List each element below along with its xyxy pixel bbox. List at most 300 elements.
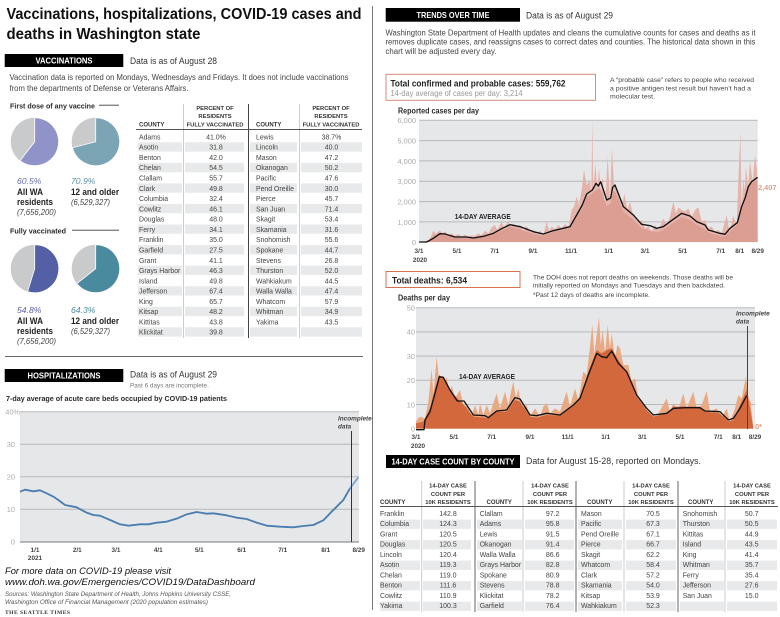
table: 14-day case count by county: 50.5 bbox=[745, 521, 759, 528]
14-day average line bbox=[416, 351, 747, 430]
table: 14-day case count by county: Garfield bbox=[480, 603, 504, 610]
table: percent fully vaccinated by county: Clark bbox=[139, 186, 156, 193]
text block: sources: Washington Office of Financial Management (2020 population estimates) bbox=[5, 599, 208, 606]
panel: vaccinations heading: Data is as of August 28 bbox=[130, 56, 217, 66]
credit: The Seattle Times: THE SEATTLE TIMES bbox=[5, 610, 70, 616]
table: percent fully vaccinated by county: 31.8 bbox=[209, 145, 223, 152]
table: 14-day case count by county: Wahkiakum bbox=[581, 603, 617, 610]
table: 14-day case count by county: 70.5 bbox=[646, 511, 660, 518]
table: percent fully vaccinated by county: 55.6 bbox=[325, 237, 338, 244]
table: percent fully vaccinated by county bbox=[136, 104, 362, 338]
table: 14-day case count by county bbox=[380, 481, 778, 612]
table: 14-day case count by county: Klickitat bbox=[480, 593, 504, 600]
table: percent fully vaccinated by county: 35.0 bbox=[209, 237, 223, 244]
table: 14-day case count by county: 91.5 bbox=[546, 531, 560, 538]
table: 14-day case count by county: 62.2 bbox=[646, 552, 660, 559]
table: percent fully vaccinated by county: 34.9 bbox=[325, 309, 338, 316]
text block: sources bbox=[5, 591, 231, 606]
table: 14-day case count by county: Ferry bbox=[683, 572, 699, 579]
chart: deaths per day: 8/1 bbox=[732, 434, 742, 441]
table: 14-day case count by county: 86.6 bbox=[546, 552, 560, 559]
table: 14-day case count by county: 10K RESIDENTS bbox=[425, 500, 471, 506]
table: 14-day case count by county: Whatcom bbox=[581, 562, 610, 569]
panel: fully vaccinated pies: 12 and older bbox=[71, 316, 119, 326]
panel: county case count heading: 14-DAY CASE COUNT BY COUNTY bbox=[392, 456, 515, 466]
table: percent fully vaccinated by county: Grays Harbor bbox=[139, 268, 181, 275]
chart: reported cases per day: 3/1 bbox=[415, 248, 424, 255]
table: percent fully vaccinated by county: Stevens bbox=[256, 258, 281, 265]
chart: hospital beds line chart: 1/1 bbox=[31, 547, 40, 554]
table: percent fully vaccinated by county: Whitman bbox=[256, 309, 283, 316]
callout: more data link: www.doh.wa.gov/Emergencies/COVID19/DataDashboard bbox=[5, 577, 256, 588]
panel: vaccinations heading: VACCINATIONS bbox=[36, 56, 93, 66]
table: 14-day case count by county: 124.3 bbox=[439, 521, 457, 528]
table: percent fully vaccinated by county: Island bbox=[139, 278, 158, 285]
chart: reported cases per day: 1/1 bbox=[604, 248, 614, 255]
text block: vaccination note: Vaccination data is reported on Mondays, Wednesdays and Fridays. It does not include vaccinations bbox=[10, 73, 349, 82]
panel: fully vaccinated pies: Fully vaccinated bbox=[10, 226, 66, 236]
table: percent fully vaccinated by county: Douglas bbox=[139, 217, 165, 224]
table: 14-day case count by county: Lincoln bbox=[380, 552, 402, 559]
column divider bbox=[372, 6, 373, 610]
chart: deaths per day: 14-DAY AVERAGE bbox=[459, 372, 515, 381]
table: percent fully vaccinated by county: 40.0 bbox=[325, 145, 338, 152]
table: percent fully vaccinated by county: 39.8 bbox=[209, 330, 223, 337]
table: 14-day case count by county: COUNTY bbox=[587, 500, 612, 506]
chart: hospital beds line chart: 0 bbox=[11, 538, 15, 546]
table: percent fully vaccinated by county: Pierce bbox=[256, 196, 276, 203]
table: percent fully vaccinated by county: 49.8 bbox=[209, 278, 223, 285]
chart: reported cases per day: 8/1 bbox=[735, 248, 745, 255]
pie: fully vaccinated all residents bbox=[11, 245, 59, 293]
table: 14-day case count by county: 14-DAY CASE bbox=[531, 484, 569, 490]
chart: reported cases per day: 2,407 bbox=[758, 183, 776, 192]
table: percent fully vaccinated by county: 48.0 bbox=[209, 217, 223, 224]
table: percent fully vaccinated by county: 50.2 bbox=[325, 165, 338, 172]
table: 14-day case count by county: 78.8 bbox=[546, 583, 560, 590]
table: 14-day case count by county: King bbox=[683, 552, 697, 559]
table: 14-day case count by county: Walla Walla bbox=[480, 552, 516, 559]
table: percent fully vaccinated by county: Asotin bbox=[139, 145, 158, 152]
table: 14-day case count by county: COUNTY bbox=[380, 500, 405, 506]
text block: probable case note bbox=[610, 77, 754, 100]
table: percent fully vaccinated by county: 26.8 bbox=[325, 258, 338, 265]
table: percent fully vaccinated by county: Clallam bbox=[139, 176, 162, 182]
table: percent fully vaccinated by county: Okanogan bbox=[256, 165, 288, 172]
table: percent fully vaccinated by county: 54.5 bbox=[209, 165, 223, 172]
table: 14-day case count by county: COUNT PER bbox=[735, 492, 770, 498]
table: 14-day case count by county: Chelan bbox=[380, 572, 402, 579]
chart: reported cases per day bbox=[398, 116, 776, 264]
table: percent fully vaccinated by county: 46.1 bbox=[209, 206, 223, 213]
callout: total cases box bbox=[386, 74, 596, 100]
table: 14-day case count by county: Mason bbox=[581, 511, 602, 518]
chart: reported cases per day: 14-DAY AVERAGE bbox=[455, 212, 511, 221]
table: 14-day case count by county: Asotin bbox=[380, 562, 399, 569]
table: percent fully vaccinated by county: 48.2 bbox=[209, 309, 223, 316]
table: percent fully vaccinated by county: Pacific bbox=[256, 176, 277, 182]
chart heading: cases: Reported cases per day bbox=[398, 106, 480, 116]
chart: deaths per day: 20 bbox=[407, 376, 415, 385]
chart: reported cases per day: 11/1 bbox=[565, 248, 577, 255]
table: percent fully vaccinated by county: Lewis bbox=[256, 134, 274, 141]
table: 14-day case count by county: 35.7 bbox=[745, 562, 759, 569]
table: 14-day case count by county: Grant bbox=[380, 531, 397, 538]
table: percent fully vaccinated by county: COUNTY bbox=[256, 122, 281, 128]
table: percent fully vaccinated by county: 71.4 bbox=[325, 206, 338, 213]
panel: county case count heading bbox=[386, 455, 701, 468]
daily case bars bbox=[419, 120, 758, 242]
chart: hospital beds line chart: 3/1 bbox=[112, 547, 121, 554]
chart: hospital beds line chart: 30 bbox=[7, 440, 15, 449]
table: percent fully vaccinated by county: 34.1 bbox=[209, 227, 223, 234]
chart: hospital beds line chart: 10 bbox=[7, 505, 15, 514]
text block: probable case note: molecular test. bbox=[610, 94, 655, 100]
table: percent fully vaccinated by county: 41.0% bbox=[206, 134, 226, 141]
chart: reported cases per day: 3/1 bbox=[641, 248, 650, 255]
table: percent fully vaccinated by county: FULLY VACCINATED bbox=[187, 122, 243, 128]
chart: hospital beds line chart: 4/1 bbox=[154, 547, 163, 554]
chart: reported cases per day: 6,000 bbox=[398, 116, 416, 125]
table: percent fully vaccinated by county: 55.7 bbox=[209, 176, 223, 182]
chart: reported cases per day: 8/29 bbox=[751, 248, 764, 255]
table: percent fully vaccinated by county: 32.4 bbox=[209, 196, 223, 203]
panel: first dose pies: (7,656,200) bbox=[17, 208, 56, 217]
chart: reported cases per day: 1,000 bbox=[398, 218, 416, 227]
table: percent fully vaccinated by county: Thurston bbox=[256, 268, 283, 275]
table: 14-day case count by county: 67.3 bbox=[646, 521, 660, 528]
panel: fully vaccinated pies: All WA bbox=[17, 316, 43, 326]
table: percent fully vaccinated by county: Columbia bbox=[139, 196, 168, 203]
table: 14-day case count by county: 35.4 bbox=[745, 572, 759, 579]
table: percent fully vaccinated by county: Klickitat bbox=[139, 330, 163, 337]
panel: first dose pies bbox=[10, 102, 120, 217]
table: 14-day case count by county: Kitsap bbox=[581, 593, 600, 600]
panel: hospitalizations heading bbox=[5, 369, 217, 390]
table: 14-day case count by county: Adams bbox=[480, 521, 502, 528]
table: 14-day case count by county: 66.7 bbox=[646, 542, 660, 549]
callout: total cases box: Total confirmed and probable cases: 559,762 bbox=[390, 78, 566, 88]
panel: fully vaccinated pies: 54.8% bbox=[17, 305, 42, 315]
panel: trends heading: TRENDS OVER TIME bbox=[416, 10, 490, 20]
pie: fully vaccinated 12 and older bbox=[72, 245, 120, 293]
chart: deaths per day: 5/1 bbox=[676, 434, 685, 441]
table: 14-day case count by county: Snohomish bbox=[683, 511, 717, 518]
table: percent fully vaccinated by county: Cowlitz bbox=[139, 206, 162, 213]
chart: hospital beds line chart: 5/1 bbox=[195, 547, 204, 554]
panel: fully vaccinated pies: 64.3% bbox=[71, 305, 96, 315]
panel: fully vaccinated pies bbox=[10, 226, 120, 346]
text block: trends note: chart will be adjusted every day. bbox=[386, 47, 496, 56]
table: 14-day case count by county: 10K RESIDENTS bbox=[729, 500, 775, 506]
table: percent fully vaccinated by county: Benton bbox=[139, 155, 161, 162]
table: 14-day case count by county: 27.6 bbox=[745, 583, 759, 590]
table: 14-day case count by county: 110.9 bbox=[440, 593, 457, 600]
table: 14-day case count by county: 95.8 bbox=[546, 521, 560, 528]
table: percent fully vaccinated by county: 45.7 bbox=[325, 196, 338, 203]
chart: deaths per day: 7/1 bbox=[487, 434, 497, 441]
table: percent fully vaccinated by county: Wahkiakum bbox=[256, 278, 292, 285]
chart: reported cases per day: 4,000 bbox=[398, 157, 416, 166]
table: 14-day case count by county: 119.3 bbox=[440, 562, 457, 569]
chart: hospital beds line chart: 8/1 bbox=[321, 547, 331, 554]
table: percent fully vaccinated by county: RESIDENTS bbox=[198, 114, 232, 120]
table: percent fully vaccinated by county: Yakima bbox=[256, 319, 279, 326]
text block: vaccination note: from the departments of Defense or Veterans Affairs. bbox=[10, 84, 188, 93]
table: 14-day case count by county: 14-DAY CASE bbox=[632, 484, 670, 490]
chart: hospital beds line chart: Incomplete bbox=[338, 416, 372, 422]
callout: more data link bbox=[5, 566, 256, 588]
chart: deaths per day: 40 bbox=[407, 328, 415, 337]
table: percent fully vaccinated by county: Skagit bbox=[256, 217, 275, 224]
table: 14-day case count by county: 58.4 bbox=[646, 562, 660, 569]
table: percent fully vaccinated by county: 42.0 bbox=[209, 155, 223, 162]
table: 14-day case count by county: 43.5 bbox=[745, 542, 759, 549]
table: 14-day case count by county: 120.5 bbox=[439, 531, 457, 538]
chart: reported cases per day: 2020 bbox=[413, 257, 428, 264]
table: 14-day case count by county: 82.8 bbox=[546, 562, 560, 569]
table: 14-day case count by county: Cowlitz bbox=[380, 593, 403, 600]
table: percent fully vaccinated by county: 31.6 bbox=[325, 227, 338, 234]
table: percent fully vaccinated by county: 27.5 bbox=[209, 248, 223, 254]
chart: deaths per day: 8/29 bbox=[749, 434, 762, 441]
table: percent fully vaccinated by county: Grant bbox=[139, 258, 156, 265]
table: 14-day case count by county: 52.3 bbox=[646, 603, 660, 610]
table: percent fully vaccinated by county: Kitsap bbox=[139, 309, 158, 316]
text block: probable case note: A “probable case” refers to people who received bbox=[610, 77, 754, 84]
table: percent fully vaccinated by county: Walla Walla bbox=[256, 289, 292, 296]
table: 14-day case count by county: COUNTY bbox=[486, 500, 512, 506]
table: percent fully vaccinated by county: 30.0 bbox=[325, 186, 338, 193]
table: percent fully vaccinated by county: Jefferson bbox=[139, 289, 167, 296]
text block: deaths note bbox=[533, 274, 733, 299]
table: percent fully vaccinated by county: 46.3 bbox=[209, 268, 223, 275]
text block: trends note: Washington State Department of Health updates and cleans the cumulative counts for cases and deaths as it bbox=[386, 28, 756, 38]
table: 14-day case count by county: 44.9 bbox=[745, 531, 759, 538]
chart: hospital beds line chart: 2021 bbox=[28, 555, 43, 562]
table: percent fully vaccinated by county: Whatcom bbox=[256, 299, 285, 306]
panel: trends heading bbox=[386, 8, 613, 22]
text block: trends note: removes duplicate cases, and reassigns cases to correct dates and counties. The historical data shown in this bbox=[386, 38, 756, 46]
table: 14-day case count by county: San Juan bbox=[683, 593, 712, 600]
table: percent fully vaccinated by county: PERCENT OF bbox=[312, 106, 350, 112]
chart: hospital beds line chart: 20 bbox=[7, 472, 15, 482]
panel: trends heading: Data is as of August 29 bbox=[526, 10, 613, 20]
table: percent fully vaccinated by county: PERCENT OF bbox=[196, 106, 234, 112]
panel: first dose pies: First dose of any vaccine bbox=[10, 102, 95, 110]
table: 14-day case count by county: Douglas bbox=[380, 542, 406, 549]
table: 14-day case count by county: 97.2 bbox=[546, 511, 560, 518]
table: percent fully vaccinated by county: Kittitas bbox=[139, 319, 160, 326]
pie: first dose 12 and older bbox=[72, 118, 120, 166]
table: percent fully vaccinated by county: Skamania bbox=[256, 227, 287, 234]
table: percent fully vaccinated by county: Garfield bbox=[139, 248, 163, 254]
table: 14-day case count by county: Benton bbox=[380, 583, 402, 590]
table: 14-day case count by county: COUNT PER bbox=[533, 492, 568, 498]
chart: deaths per day: 7/1 bbox=[714, 434, 723, 441]
table: 14-day case count by county: Pend Oreille bbox=[581, 531, 619, 538]
table: percent fully vaccinated by county: 52.0 bbox=[325, 268, 338, 275]
table: 14-day case count by county: 119.0 bbox=[440, 572, 457, 579]
table: percent fully vaccinated by county: 38.7% bbox=[322, 134, 341, 141]
table: 14-day case count by county: 142.8 bbox=[439, 511, 457, 518]
table: 14-day case count by county: Skamania bbox=[581, 583, 612, 590]
daily death bars bbox=[416, 317, 753, 429]
callout: total deaths box: Total deaths: 6,534 bbox=[392, 274, 468, 286]
callout: more data link: For more data on COVID-19 please visit bbox=[5, 566, 171, 577]
chart: reported cases per day: 2,000 bbox=[398, 198, 416, 206]
chart heading: deaths: Deaths per day bbox=[398, 294, 451, 302]
panel: hospitalizations heading: Data is as of August 29 bbox=[130, 370, 217, 380]
chart: deaths per day: 9/1 bbox=[526, 434, 535, 441]
panel: first dose pies: All WA bbox=[17, 187, 43, 197]
chart: deaths per day: 10 bbox=[407, 400, 415, 409]
panel: county case count heading: Data for August 15-28, reported on Mondays. bbox=[526, 456, 701, 466]
panel: first dose pies: residents bbox=[17, 197, 53, 207]
table: 14-day case count by county: 41.4 bbox=[745, 552, 759, 559]
chart: hospital beds line chart bbox=[5, 408, 372, 562]
table: percent fully vaccinated by county: 65.7 bbox=[209, 299, 223, 306]
table: percent fully vaccinated by county: 47.4 bbox=[325, 289, 338, 296]
table: 14-day case count by county: 15.0 bbox=[745, 593, 759, 600]
table: percent fully vaccinated by county: Spokane bbox=[256, 248, 283, 254]
text block: vaccination note bbox=[10, 73, 349, 93]
text block: deaths note: initially reported on Mondays and Tuesdays and then backdated. bbox=[533, 282, 725, 290]
table: 14-day case count by county: Columbia bbox=[380, 521, 409, 528]
table: percent fully vaccinated by county: RESIDENTS bbox=[314, 114, 348, 120]
table: 14-day case count by county: 80.9 bbox=[546, 572, 560, 579]
panel: first dose pies: (6,529,327) bbox=[71, 198, 110, 207]
table: percent fully vaccinated by county: FULLY VACCINATED bbox=[303, 122, 359, 128]
table: 14-day case count by county: 10K RESIDENTS bbox=[628, 500, 674, 506]
table: 14-day case count by county: 14-DAY CASE bbox=[733, 484, 771, 490]
table: 14-day case count by county: 14-DAY CASE bbox=[429, 484, 467, 490]
table: 14-day case count by county: Jefferson bbox=[683, 583, 711, 590]
title: deaths in Washington state bbox=[6, 26, 201, 43]
chart: deaths per day: 50 bbox=[407, 304, 415, 312]
table: 14-day case count by county: 91.4 bbox=[546, 542, 560, 549]
table: percent fully vaccinated by county: 47.6 bbox=[325, 176, 338, 182]
panel: hospitalizations heading: HOSPITALIZATIONS bbox=[28, 370, 101, 380]
text block: deaths note: The DOH does not report deaths on weekends. Those deaths will be bbox=[533, 274, 733, 282]
table: percent fully vaccinated by county: 57.9 bbox=[325, 299, 338, 306]
chart: reported cases per day: 5,000 bbox=[398, 136, 416, 146]
table: 14-day case count by county: Franklin bbox=[380, 511, 405, 518]
chart: deaths per day: 0* bbox=[755, 422, 762, 431]
table: 14-day case count by county: 50.7 bbox=[745, 511, 759, 518]
table: percent fully vaccinated by county: 53.4 bbox=[325, 217, 338, 224]
chart: deaths per day: 2020 bbox=[411, 443, 426, 450]
text block: probable case note: a positive antigen test result but haven’t had a bbox=[610, 85, 751, 92]
table: percent fully vaccinated by county: Adams bbox=[139, 134, 161, 141]
text block: sources: Sources: Washington State Department of Health, Johns Hopkins University CSSE, bbox=[5, 591, 231, 598]
chart: reported cases per day: 5/1 bbox=[453, 248, 462, 255]
table: 14-day case count by county: Pierce bbox=[581, 542, 601, 549]
table: 14-day case count by county: 76.4 bbox=[546, 603, 560, 610]
table: percent fully vaccinated by county: Ferry bbox=[139, 227, 156, 234]
chart: hospital beds line chart: 8/29 bbox=[352, 547, 365, 554]
table: 14-day case count by county: COUNTY bbox=[688, 500, 713, 506]
chart: reported cases per day: 0 bbox=[412, 238, 416, 247]
table: 14-day case count by county: 78.2 bbox=[546, 593, 560, 600]
table: percent fully vaccinated by county: 47.2 bbox=[325, 155, 338, 162]
chart: deaths per day: 3/1 bbox=[638, 434, 647, 441]
table: 14-day case count by county: Grays Harbor bbox=[480, 562, 522, 569]
table: percent fully vaccinated by county: 41.1 bbox=[209, 258, 223, 265]
table: percent fully vaccinated by county: 44.5 bbox=[325, 278, 338, 285]
chart: deaths per day: 11/1 bbox=[562, 434, 574, 441]
chart: deaths per day: 0 bbox=[411, 424, 415, 434]
table: 14-day case count by county: Thurston bbox=[683, 521, 710, 528]
table: percent fully vaccinated by county: Franklin bbox=[139, 237, 164, 244]
table: percent fully vaccinated by county: 43.5 bbox=[325, 319, 338, 326]
table: percent fully vaccinated by county: COUNTY bbox=[139, 122, 164, 128]
table: percent fully vaccinated by county: King bbox=[139, 299, 153, 306]
text block: deaths note: *Past 12 days of deaths are incomplete. bbox=[533, 292, 650, 299]
table: 14-day case count by county: COUNT PER bbox=[634, 492, 669, 498]
table: 14-day case count by county: 120.5 bbox=[439, 542, 457, 549]
chart: deaths per day: 1/1 bbox=[601, 434, 611, 441]
table: 14-day case count by county: 54.0 bbox=[646, 583, 660, 590]
chart: hospital beds line chart: 40% bbox=[5, 408, 20, 416]
panel: first dose pies: 70.9% bbox=[71, 176, 96, 186]
table: percent fully vaccinated by county: Mason bbox=[256, 155, 277, 162]
chart: deaths per day bbox=[407, 304, 770, 450]
panel: fully vaccinated pies: (7,656,200) bbox=[17, 337, 56, 346]
table: 14-day case count by county: 100.3 bbox=[439, 603, 457, 610]
panel: vaccinations heading bbox=[5, 54, 217, 67]
panel: hospitalizations heading: Past 6 days are incomplete. bbox=[130, 382, 209, 390]
table: 14-day case count by county: Spokane bbox=[480, 572, 507, 579]
table: 14-day case count by county: Lewis bbox=[480, 531, 498, 538]
pie: first dose all residents bbox=[11, 118, 59, 166]
panel: first dose pies: 60.5% bbox=[17, 176, 42, 186]
14-day average line bbox=[419, 177, 758, 242]
table: 14-day case count by county: Skagit bbox=[581, 552, 600, 559]
table: percent fully vaccinated by county: Lincoln bbox=[256, 145, 278, 152]
chart: deaths per day: 3/1 bbox=[412, 434, 421, 441]
table: 14-day case count by county: 57.2 bbox=[646, 572, 660, 579]
table: 14-day case count by county: 111.6 bbox=[440, 583, 456, 590]
chart heading: hospitalizations: 7-day average of acute care beds occupied by COVID-19 patients bbox=[6, 394, 227, 403]
table: percent fully vaccinated by county: 67.4 bbox=[209, 289, 223, 296]
table: percent fully vaccinated by county: San Juan bbox=[256, 206, 285, 213]
table: 14-day case count by county: 67.1 bbox=[646, 531, 660, 538]
table: 14-day case count by county: Kittitas bbox=[683, 531, 704, 538]
table: percent fully vaccinated by county: Snohomish bbox=[256, 237, 291, 244]
table: percent fully vaccinated by county: 44.7 bbox=[325, 248, 338, 254]
title: Vaccinations, hospitalizations, COVID-19 cases and bbox=[6, 6, 362, 23]
table: 14-day case count by county: Island bbox=[683, 542, 701, 549]
chart: hospital beds line chart: 7/1 bbox=[278, 547, 288, 554]
table: 14-day case count by county: Clallam bbox=[480, 511, 503, 518]
table: 14-day case count by county: COUNT PER bbox=[431, 492, 466, 498]
table: 14-day case count by county: Pacific bbox=[581, 521, 602, 528]
chart: deaths per day: 5/1 bbox=[450, 434, 459, 441]
chart: reported cases per day: 7/1 bbox=[716, 248, 726, 255]
chart: deaths per day: 30 bbox=[407, 352, 415, 361]
table: 14-day case count by county: Whitman bbox=[683, 562, 710, 569]
table: percent fully vaccinated by county: 43.8 bbox=[209, 319, 223, 326]
table: percent fully vaccinated by county: Pend Oreille bbox=[256, 186, 294, 193]
callout: total cases box: 14-day average of cases per day: 3,214 bbox=[390, 89, 523, 98]
title bbox=[6, 6, 362, 43]
chart: hospital beds line chart: 2/1 bbox=[73, 547, 82, 554]
chart: reported cases per day: 7/1 bbox=[490, 248, 500, 255]
panel: first dose pies: 12 and older bbox=[71, 187, 119, 197]
table: 14-day case count by county: Okanogan bbox=[480, 542, 512, 549]
chart: reported cases per day: 3,000 bbox=[398, 177, 416, 186]
